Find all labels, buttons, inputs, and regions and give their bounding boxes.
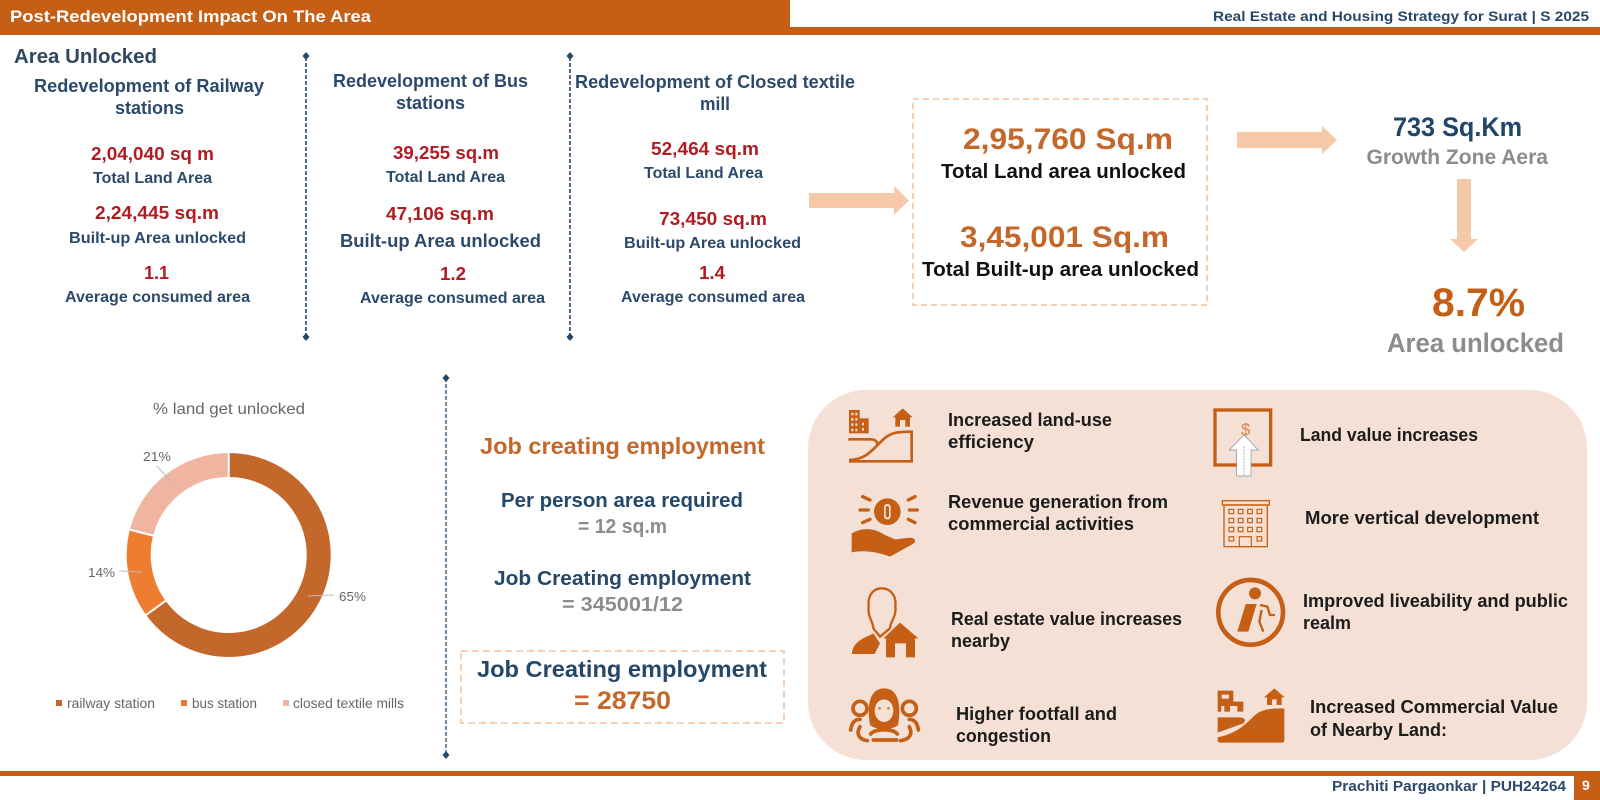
bus built-up: Built-up Area unlocked <box>340 231 541 251</box>
railway average <box>65 263 250 306</box>
icon: person and house <box>852 588 918 657</box>
text: revenue generation <box>948 492 1168 534</box>
mill total land: Total Land Area <box>644 165 763 182</box>
data labels: 14% <box>88 565 115 580</box>
mill built-up: Built-up Area unlocked <box>624 235 801 252</box>
per person area <box>501 490 743 538</box>
arrow: columns to totals <box>809 186 909 215</box>
growth zone area: Growth Zone Aera <box>1366 146 1548 169</box>
total land area <box>941 123 1186 183</box>
icon: land value arrow: $ <box>1241 420 1250 439</box>
arrow: totals to growth zone <box>1237 126 1337 154</box>
section heading: area unlocked: Area Unlocked <box>14 46 157 68</box>
bus average <box>360 264 545 307</box>
mill heading: mill <box>700 94 730 114</box>
bus average: 1.2 <box>440 264 466 284</box>
mill total land: 52,464 sq.m <box>651 139 759 159</box>
report name: Real Estate and Housing Strategy for Surat | S 2025 <box>1213 8 1589 24</box>
footer author: Prachiti Pargaonkar | PUH24264 <box>1332 778 1567 795</box>
text: commercial value: of Nearby Land: <box>1310 720 1447 740</box>
railway heading <box>34 76 264 118</box>
text: liveability: Improved liveability and public <box>1303 591 1568 611</box>
railway built-up: 2,24,445 sq.m <box>95 203 219 223</box>
per person area: = 12 sq.m <box>578 516 667 538</box>
donut rings <box>139 465 319 645</box>
text: vertical development: More vertical development <box>1305 508 1539 528</box>
title: Post-Redevelopment Impact On The Area <box>10 7 372 26</box>
job result box <box>461 651 784 723</box>
legend: bus station <box>192 696 257 711</box>
text: real estate value: Real estate value increases <box>951 609 1182 629</box>
railway average: Average consumed area <box>65 289 250 306</box>
mill total land <box>644 139 763 182</box>
mill built-up <box>624 209 801 252</box>
panel: railway stations <box>34 76 264 306</box>
mill average <box>621 263 805 306</box>
text: commercial value <box>1310 697 1558 740</box>
area unlocked percentage: Area unlocked <box>1387 328 1564 358</box>
job formula: Job Creating employment <box>494 568 751 590</box>
railway total land <box>91 144 214 187</box>
railway heading: stations <box>115 98 184 118</box>
data labels: 21% <box>143 449 171 464</box>
divider 1 <box>302 52 310 341</box>
text: higher footfall <box>956 704 1117 746</box>
footer <box>0 771 1600 800</box>
panel: totals box <box>913 99 1207 305</box>
bus built-up: 47,106 sq.m <box>386 204 494 224</box>
mill average: 1.4 <box>699 263 725 283</box>
railway average: 1.1 <box>144 263 169 283</box>
total land area: Total Land area unlocked <box>941 161 1186 183</box>
railway built-up <box>69 203 246 247</box>
page number: 9 <box>1582 777 1590 793</box>
text: liveability <box>1303 591 1568 633</box>
data labels: 65% <box>339 589 366 604</box>
bus total land: Total Land Area <box>386 169 505 186</box>
mill heading: Redevelopment of Closed textile <box>575 72 855 92</box>
page number <box>1574 771 1600 800</box>
area unlocked percentage: 8.7% <box>1432 281 1525 325</box>
job result box: = 28750 <box>574 687 671 715</box>
icon: land value arrow <box>1215 410 1271 476</box>
icon: revenue hand and coin <box>852 497 917 557</box>
text: revenue generation: Revenue generation from <box>948 492 1168 512</box>
railway total land: Total Land Area <box>93 170 212 187</box>
bus total land <box>386 143 505 186</box>
per person area: Per person area required <box>501 490 743 512</box>
arrow: growth zone to percentage <box>1450 179 1478 252</box>
icon: tall building <box>1222 501 1269 547</box>
mill built-up: 73,450 sq.m <box>659 209 767 229</box>
total built-up area: Total Built-up area unlocked <box>922 259 1199 281</box>
text: land-use efficiency: efficiency <box>948 432 1034 452</box>
bus heading <box>333 71 528 113</box>
legend: closed textile mills <box>293 696 404 711</box>
text: real estate value <box>951 609 1182 651</box>
mill average: Average consumed area <box>621 289 805 306</box>
icon: land use <box>848 408 913 461</box>
text: land-use efficiency: Increased land-use <box>948 410 1112 430</box>
railway heading: Redevelopment of Railway <box>34 76 264 96</box>
total built-up area: 3,45,001 Sq.m <box>960 221 1169 254</box>
job formula: = 345001/12 <box>562 594 683 616</box>
growth zone area <box>1366 112 1548 169</box>
text: real estate value: nearby <box>951 631 1010 651</box>
text: higher footfall: congestion <box>956 726 1051 746</box>
panel: closed textile mill <box>575 72 855 306</box>
panel: bus stations <box>333 71 545 307</box>
text: liveability: realm <box>1303 613 1351 633</box>
total land area: 2,95,760 Sq.m <box>963 123 1173 156</box>
bus built-up <box>340 204 541 251</box>
growth zone area: 733 Sq.Km <box>1393 112 1522 142</box>
mill heading <box>575 72 855 114</box>
job result box: Job Creating employment <box>477 656 767 682</box>
area unlocked percentage <box>1387 281 1564 358</box>
data labels <box>88 449 366 604</box>
job heading: Job creating employment <box>480 433 765 459</box>
divider 3 <box>442 374 450 759</box>
text: land value: Land value increases <box>1300 425 1478 445</box>
divider 2 <box>566 52 574 341</box>
total built-up area <box>922 221 1199 281</box>
panel: benefits <box>808 390 1587 760</box>
bus heading: Redevelopment of Bus <box>333 71 528 91</box>
text: land-use efficiency <box>948 410 1112 452</box>
bus heading: stations <box>396 93 465 113</box>
icon: commercial land <box>1218 688 1285 743</box>
text: higher footfall: Higher footfall and <box>956 704 1117 724</box>
text: commercial value: Increased Commercial Value <box>1310 697 1558 717</box>
job formula <box>494 568 751 616</box>
railway built-up: Built-up Area unlocked <box>69 230 246 247</box>
chart title: % land get unlocked <box>153 401 305 418</box>
legend: railway station <box>67 696 155 711</box>
legend <box>56 696 404 711</box>
bus total land: 39,255 sq.m <box>393 143 499 163</box>
railway total land: 2,04,040 sq m <box>91 144 214 164</box>
icon: liveability <box>1218 580 1283 645</box>
bus average: Average consumed area <box>360 290 545 307</box>
donut chart: % land get unlocked <box>56 401 404 711</box>
panel: job creation <box>461 433 784 723</box>
icon: crowd <box>851 688 918 741</box>
text: revenue generation: commercial activities <box>948 514 1134 534</box>
header band <box>0 0 1600 35</box>
